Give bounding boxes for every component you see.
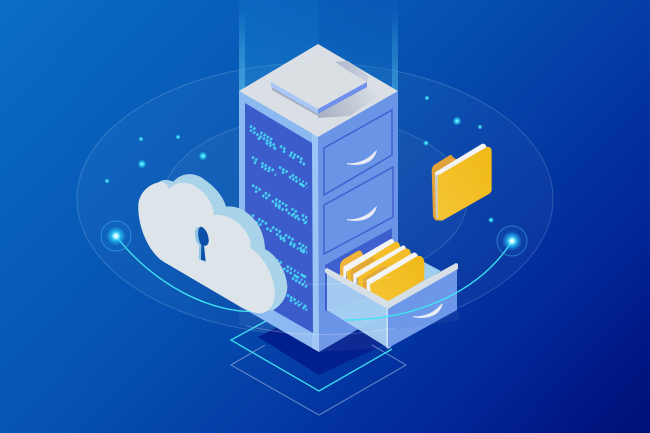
ring overlay on server (239, 277, 460, 352)
cyan floor outline (231, 321, 392, 391)
handle (347, 150, 377, 165)
cloud front (138, 182, 275, 313)
white sheet three (367, 253, 418, 296)
cloud with keyhole (138, 174, 287, 313)
slab (271, 54, 367, 114)
drawer corner (386, 303, 391, 349)
cloud seam (166, 190, 273, 282)
folders in drawer (340, 239, 424, 303)
folder back (432, 155, 458, 221)
keyhole (198, 227, 209, 261)
server tower (239, 91, 398, 352)
right face (318, 91, 398, 352)
floating folder (432, 144, 492, 221)
left face (239, 91, 319, 352)
third tab (363, 266, 388, 293)
white sheet two (353, 245, 407, 286)
white sheet (343, 239, 396, 282)
drawer one (324, 110, 392, 195)
drawer side face (327, 272, 388, 348)
keyhole shade (195, 227, 205, 262)
paper shadow (435, 174, 438, 218)
server top (239, 44, 398, 137)
front slab shadow (318, 87, 378, 118)
left node (101, 221, 131, 251)
open drawer (325, 239, 458, 349)
handle (347, 206, 377, 221)
drawer two (324, 167, 393, 254)
back folder tab (340, 251, 364, 280)
light beam above server (239, 0, 398, 112)
top surface (239, 44, 398, 137)
back shadow wedge (335, 61, 369, 82)
shadow under server (258, 300, 388, 375)
drawer front face (388, 265, 457, 348)
left part of cyan arc (116, 236, 262, 312)
second folder (347, 242, 400, 282)
front folder (370, 256, 424, 303)
led panel (245, 103, 313, 333)
stars (104, 95, 494, 223)
drawer rim (325, 263, 458, 309)
folder paper (435, 144, 488, 218)
third folder (357, 249, 411, 289)
folder front (438, 147, 492, 221)
left column edge (312, 133, 319, 352)
grey floor outline (231, 345, 406, 415)
cloud back (158, 174, 287, 311)
second tab (351, 257, 375, 283)
left slab shadow (272, 86, 318, 116)
drawer interior (380, 260, 441, 305)
right node (497, 226, 527, 256)
handle (413, 303, 443, 318)
drawer three cavity (325, 228, 392, 311)
orbit rings (77, 63, 553, 335)
right part of cyan arc (345, 241, 512, 320)
led dots (250, 126, 307, 310)
floor squares (231, 300, 406, 415)
